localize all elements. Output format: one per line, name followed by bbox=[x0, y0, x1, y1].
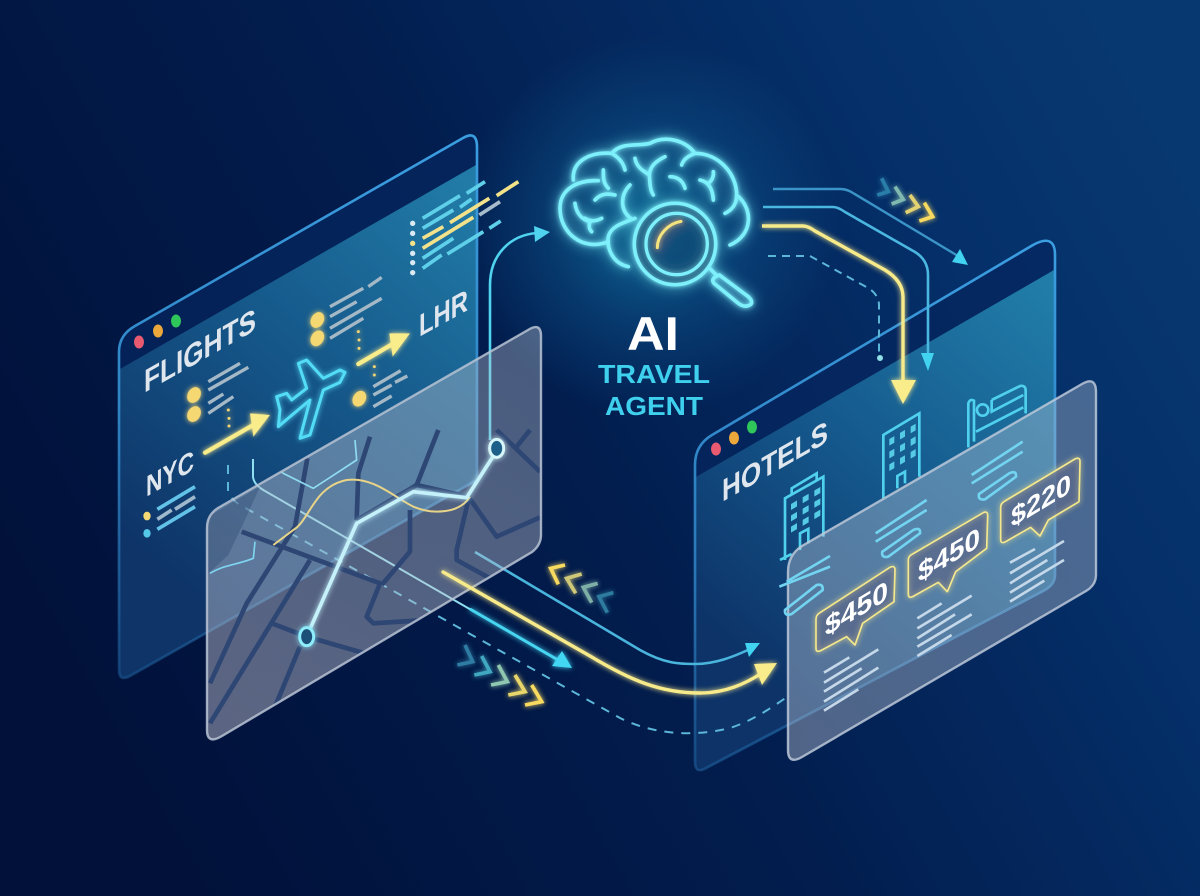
window controls bbox=[711, 420, 757, 456]
price bubbles bbox=[816, 458, 1080, 651]
map outline bbox=[207, 327, 541, 739]
lens highlight bbox=[657, 221, 681, 248]
panel: flights bbox=[119, 135, 518, 678]
brain glow bbox=[440, 20, 860, 420]
scenic yellow path bbox=[273, 480, 470, 545]
hotels window frame bbox=[695, 241, 1055, 770]
flights window body bbox=[120, 165, 476, 677]
title block bbox=[598, 307, 710, 421]
price: $450 left: $450 bbox=[825, 574, 888, 643]
arrow: return line blue bbox=[475, 552, 760, 664]
title: AI: AI bbox=[627, 307, 679, 360]
label: LHR: LHR bbox=[419, 283, 468, 344]
arrow: brain to hotels yellow bbox=[762, 226, 916, 404]
flights window frame bbox=[119, 135, 477, 678]
arrow: plane to LHR bbox=[358, 333, 410, 364]
magnifier handle bbox=[711, 269, 752, 306]
heading: flights: FLIGHTS bbox=[144, 302, 256, 400]
brain folds bbox=[575, 157, 713, 232]
label: NYC: NYC bbox=[146, 444, 194, 503]
table bullets bbox=[410, 221, 415, 275]
title: agent: AGENT bbox=[605, 391, 703, 421]
map glass bbox=[207, 327, 541, 739]
icon: bed bbox=[968, 386, 1026, 447]
arrow: NYC to plane bbox=[205, 413, 270, 453]
NYC details bbox=[143, 487, 195, 538]
hotels window outline bbox=[695, 241, 1055, 770]
arrow: brain to hotels cyan bbox=[763, 207, 934, 371]
price: $220: $220 bbox=[1011, 467, 1071, 534]
magnifier lens bbox=[634, 203, 716, 285]
listing lines bbox=[824, 541, 1064, 711]
magnifier inner ring bbox=[646, 213, 707, 275]
chevrons backward bbox=[551, 565, 613, 613]
icon: hotel building left bbox=[780, 473, 823, 560]
icon: brain with magnifier bbox=[560, 139, 752, 306]
heading: hotels: HOTELS bbox=[722, 415, 828, 509]
map roads bbox=[208, 430, 540, 723]
yellow markers bbox=[184, 310, 376, 427]
room description lines bbox=[779, 442, 1023, 615]
panel: hotel prices bbox=[779, 381, 1096, 760]
glass card bbox=[788, 381, 1096, 760]
panel: map bbox=[207, 327, 541, 739]
icon: plane bbox=[277, 360, 345, 438]
window controls bbox=[134, 314, 181, 348]
arrow: dashed lower route bbox=[228, 465, 790, 733]
chevrons top bbox=[877, 178, 933, 221]
chevrons forward bbox=[457, 645, 542, 705]
flights window outline bbox=[119, 135, 477, 678]
hotels window body bbox=[696, 270, 1054, 769]
arrow: yellow main route bbox=[443, 572, 777, 693]
route end node bbox=[490, 439, 504, 457]
arrow: map up to brain bbox=[490, 226, 550, 440]
panel: hotels bbox=[695, 241, 1055, 770]
map route details bbox=[273, 439, 504, 646]
flight details bbox=[184, 182, 518, 453]
arrow: flights to hotels cyan bbox=[253, 459, 572, 668]
icons: buildings and bed bbox=[780, 386, 1026, 560]
brain outline bbox=[560, 139, 748, 267]
route glowing line bbox=[307, 453, 495, 637]
icon: hotel building middle bbox=[883, 413, 919, 498]
route start node bbox=[300, 628, 314, 646]
arrow: brain to top right bbox=[773, 189, 968, 265]
price: $450 middle: $450 bbox=[918, 521, 980, 589]
title: travel: TRAVEL bbox=[598, 359, 710, 389]
card contents bbox=[779, 442, 1080, 711]
detail lines gray bbox=[208, 277, 407, 413]
table rows top right bbox=[423, 182, 518, 268]
arrow: dashed to hotels bbox=[768, 256, 883, 361]
